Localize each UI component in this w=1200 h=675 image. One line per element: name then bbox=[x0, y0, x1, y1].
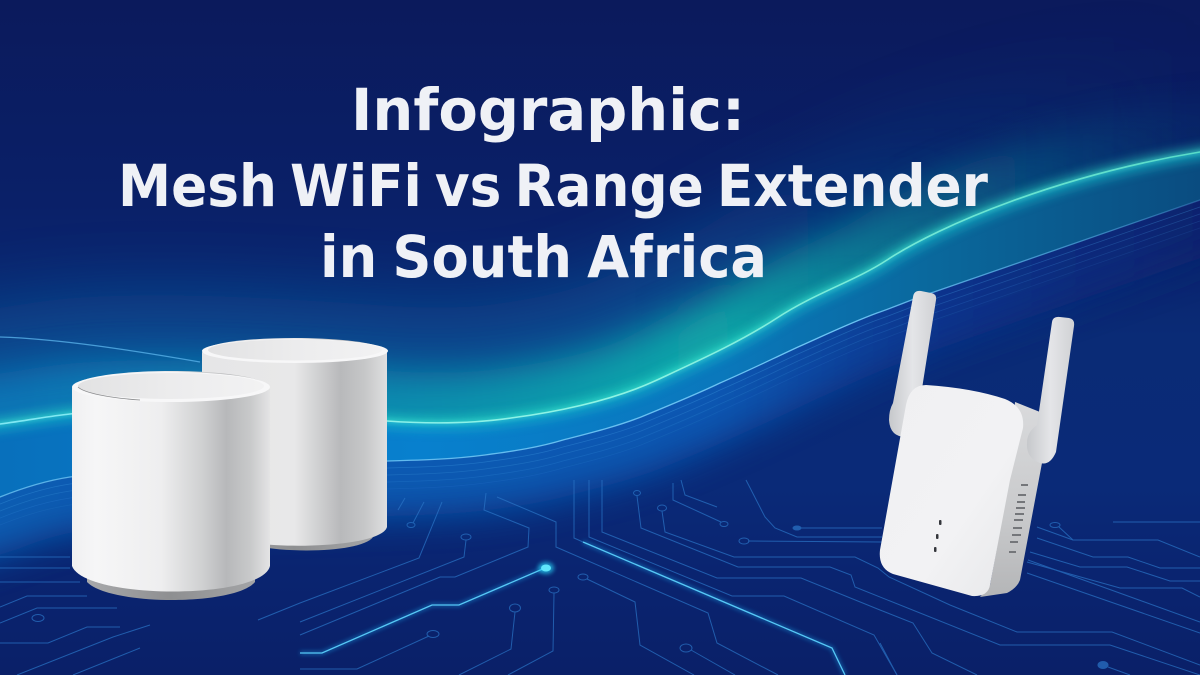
range extender bbox=[880, 291, 1074, 597]
title bbox=[118, 76, 988, 291]
extender right antenna bbox=[1027, 317, 1074, 464]
extender front panel bbox=[880, 385, 1023, 596]
title: in South Africa bbox=[320, 223, 767, 291]
title: Mesh WiFi vs Range Extender bbox=[118, 152, 988, 220]
circuit board traces bbox=[0, 480, 1200, 675]
extender left antenna bbox=[889, 291, 936, 437]
extender status dots bbox=[934, 520, 942, 552]
mesh wifi rear unit bbox=[202, 338, 388, 550]
mesh wifi front unit bbox=[72, 371, 270, 600]
glowing wave band bbox=[0, 135, 1200, 573]
title: Infographic: bbox=[351, 76, 745, 144]
glowing circuit trace with node bbox=[300, 542, 845, 675]
extender body side bbox=[980, 402, 1042, 597]
extender vents bbox=[1009, 485, 1028, 552]
